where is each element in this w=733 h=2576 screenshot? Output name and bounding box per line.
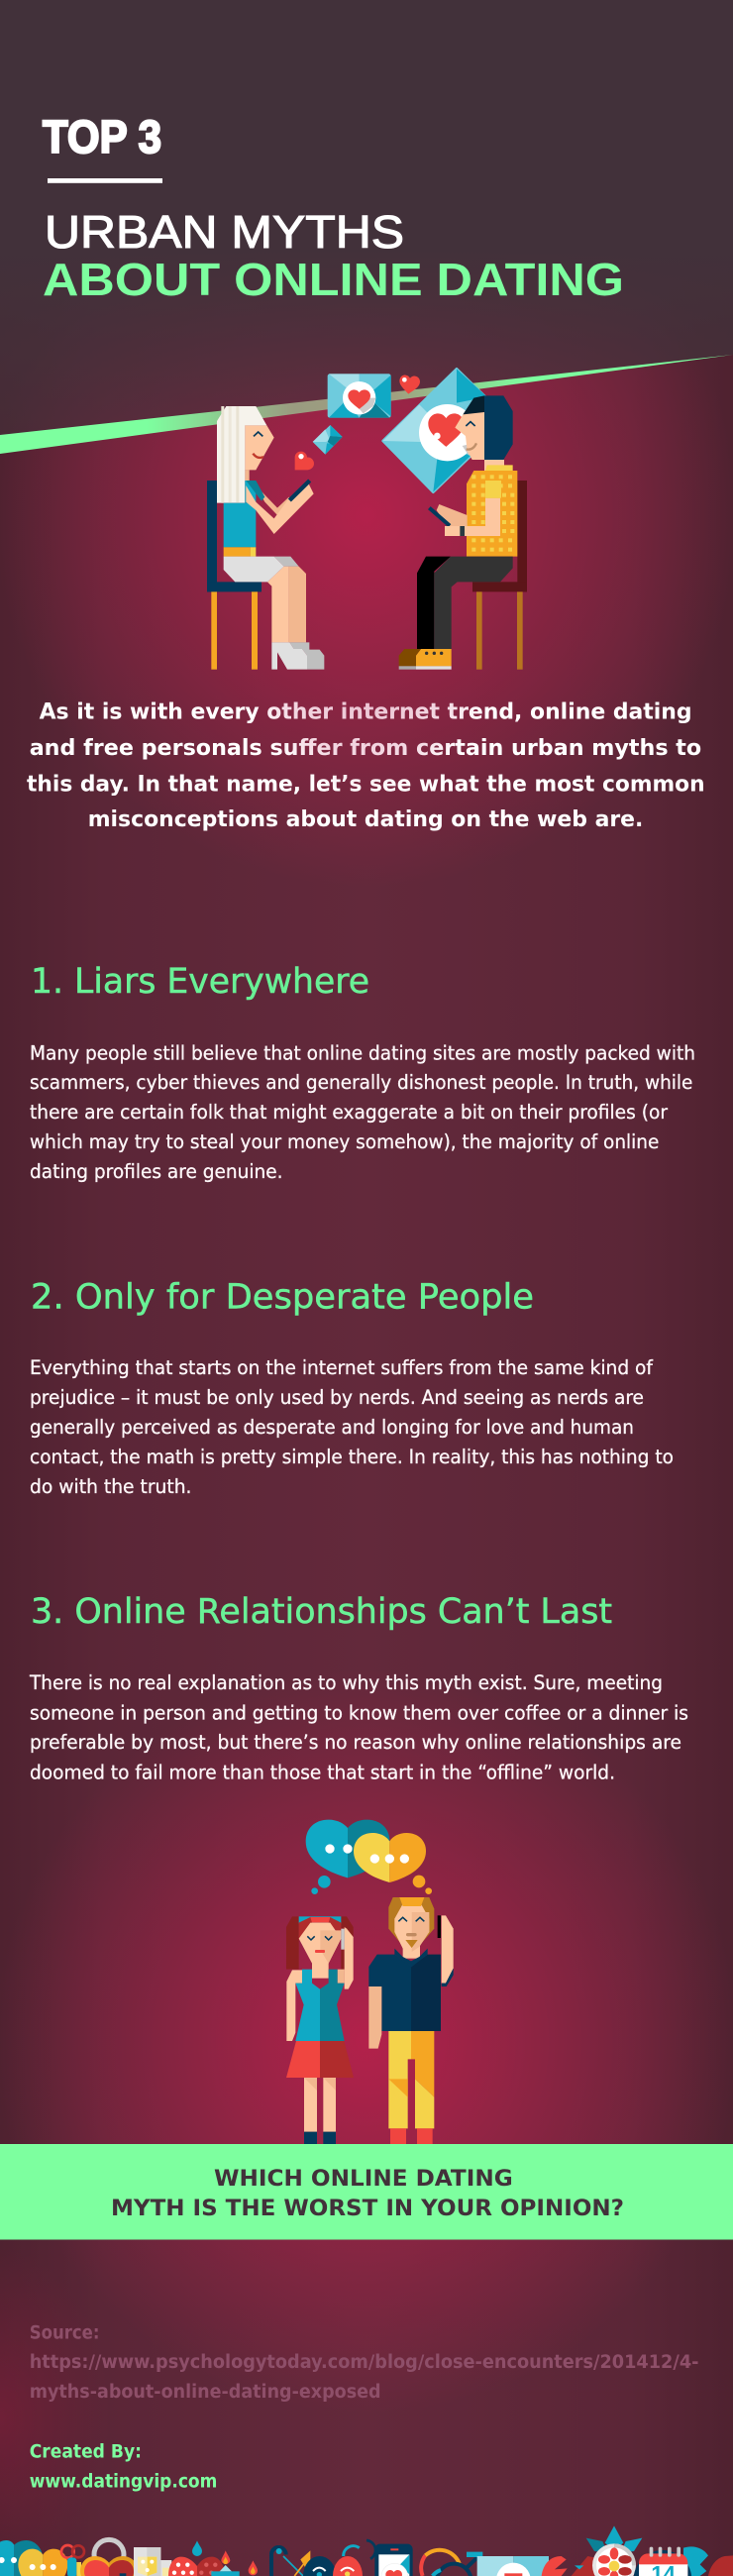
icon: key rings [61, 2545, 84, 2576]
icon: calendar [634, 2547, 691, 2576]
myth 2 body: generally perceived as desperate and longing for love and human [30, 1416, 634, 1439]
creator credits [30, 2442, 217, 2493]
icon: red cracked circle [542, 2556, 568, 2576]
myth 2 heading: 2. Only for Desperate People [31, 1278, 534, 1318]
icon: small flame [249, 2560, 258, 2575]
title divider bar [48, 178, 162, 183]
icon: gender rings [421, 2550, 482, 2576]
icon: large envelope [383, 369, 508, 492]
icon: dark red heart edge [708, 2555, 733, 2576]
icon: teal heart bubble [0, 2540, 43, 2576]
icon: navy hook [366, 2540, 375, 2559]
myth 1 heading: 1. Liars Everywhere [31, 962, 369, 1002]
intro text: this day. In that name, let’s see what the most common [27, 771, 705, 797]
call to action banner [0, 2144, 733, 2239]
myth 1 body: which may try to steal your money somehow), the majority of online [30, 1130, 659, 1153]
icon: diamond envelope [313, 425, 343, 455]
source credits: myths-about-online-dating-exposed [30, 2382, 381, 2403]
icon: candle [211, 2550, 240, 2576]
man standing [368, 1897, 454, 2144]
title: top 3: TOP 3 [43, 111, 161, 162]
myth 1 body: dating profiles are genuine. [30, 1160, 283, 1183]
illustration: seated couple texting [207, 369, 527, 670]
icon: champagne glasses [134, 2547, 171, 2576]
intro text: and free personals suffer from certain urban myths to [30, 735, 701, 761]
myth 3 [29, 1592, 688, 1783]
title: urban myths: URBAN MYTHS [45, 206, 404, 258]
icon: water drop [192, 2540, 202, 2556]
icon: navy wifi heart [303, 2556, 336, 2576]
icon: phone with heart [374, 2544, 413, 2576]
illustration: standing couple [286, 1820, 454, 2144]
icon: teal heart speech bubble [306, 1820, 389, 1894]
creator credits: Created By: [30, 2442, 142, 2463]
icon: yellow heart speech bubble [354, 1833, 432, 1894]
intro text: misconceptions about dating on the web are. [88, 806, 643, 832]
myth 2 body [30, 1356, 674, 1498]
bottom icon strip, left half [0, 2539, 363, 2576]
myth 2 [30, 1278, 674, 1498]
green diagonal strip [0, 355, 733, 454]
icon: padlock heart [80, 2539, 138, 2576]
myth 3 body: There is no real explanation as to why this myth exist. Sure, meeting [29, 1671, 663, 1694]
icon: small heart left [295, 452, 314, 470]
myth 3 heading: 3. Online Relationships Can’t Last [31, 1592, 612, 1632]
myth 2 body: do with the truth. [30, 1475, 192, 1498]
icon: dark red arrow shape [572, 2556, 600, 2576]
woman figure [217, 406, 324, 670]
myth 1 body: scammers, cyber thieves and generally dishonest people. In truth, while [30, 1071, 692, 1094]
myth 1 [30, 962, 695, 1183]
icon: dice hearts [168, 2557, 225, 2576]
myth 2 body: Everything that starts on the internet suffers from the same kind of [30, 1356, 654, 1379]
intro text [27, 699, 705, 832]
title [43, 111, 624, 305]
source credits: https://www.psychologytoday.com/blog/close-encounters/201412/4- [30, 2352, 698, 2373]
icon: teal leaf behind calendar [683, 2546, 708, 2576]
icon: cupid bow and arrow [271, 2547, 310, 2576]
icon: red wifi heart [333, 2546, 363, 2576]
myth 3 body: doomed to fail more than those that start in the “offline” world. [30, 1762, 615, 1783]
myth 3 body: someone in person and getting to know them over coffee or a dinner is [30, 1701, 688, 1724]
man chair [472, 481, 527, 670]
call to action banner: WHICH ONLINE DATING [214, 2166, 513, 2192]
intro text: As it is with every other internet trend, online dating [40, 699, 692, 725]
woman standing [286, 1916, 354, 2144]
bottom icon strip, right half [366, 2525, 733, 2576]
title: about online dating: ABOUT ONLINE DATING [43, 254, 624, 305]
myth 1 body: Many people still believe that online dating sites are mostly packed with [30, 1041, 695, 1064]
icon: flower badge [586, 2525, 642, 2576]
man figure [399, 395, 517, 670]
woman chair [207, 481, 262, 670]
myth 1 body [30, 1041, 695, 1183]
creator credits: www.datingvip.com [30, 2471, 217, 2493]
icon: envelope with heart [477, 2556, 549, 2576]
call to action banner: MYTH IS THE WORST IN YOUR OPINION? [111, 2196, 624, 2221]
icon: yellow heart bubble [18, 2549, 67, 2576]
source credits [30, 2322, 698, 2403]
myth 1 body: there are certain folk that might exaggerate a bit on their profiles (or [30, 1101, 669, 1124]
myth 2 body: prejudice – it must be only used by nerds. And seeing as nerds are [30, 1386, 644, 1409]
source credits: Source: [30, 2322, 100, 2343]
myth 2 body: contact, the math is pretty simple there. In reality, this has nothing to [30, 1446, 674, 1468]
icon: small heart top [398, 375, 421, 395]
myth 3 body: preferable by most, but there’s no reason why online relationships are [30, 1731, 681, 1754]
myth 3 body [29, 1671, 688, 1783]
icon: small envelope [328, 374, 391, 418]
